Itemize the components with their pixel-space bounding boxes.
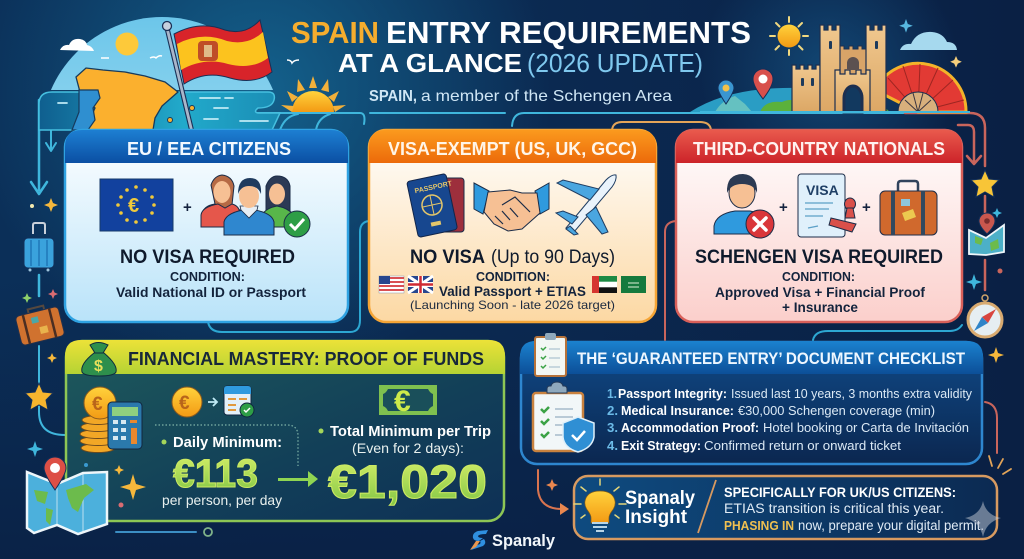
icon: euro banknote	[379, 385, 437, 418]
cloud	[60, 39, 94, 51]
insight text: PHASING IN	[724, 518, 794, 533]
condition text: Valid Passport + ETIAS	[439, 284, 586, 299]
sky dome	[51, 17, 273, 90]
icon: coin to calendar	[172, 386, 254, 417]
title: ENTRY REQUIREMENTS	[386, 16, 751, 50]
condition text: + Insurance	[782, 300, 858, 315]
checklist item 4: Confirmed return or onward ticket	[704, 438, 901, 453]
total minimum label: (Even for 2 days):	[352, 440, 464, 456]
sea	[39, 92, 280, 130]
icon: blue luggage	[24, 223, 54, 272]
connector lines	[31, 100, 997, 532]
icon: suitcase	[880, 181, 937, 235]
illustration: sun, globe, castle and fan	[690, 17, 970, 113]
icon: small clipboard	[535, 333, 566, 376]
status text: SCHENGEN VISA REQUIRED	[695, 247, 943, 268]
map pins	[718, 80, 734, 104]
plus sign: +	[183, 199, 192, 216]
title	[291, 16, 751, 78]
title: (2026 UPDATE)	[527, 48, 703, 78]
checklist item 4: 4.	[607, 438, 618, 453]
insight title	[625, 488, 695, 528]
divider slash	[698, 480, 716, 533]
icon: star right	[971, 170, 999, 197]
icon: EU flag	[100, 179, 173, 231]
status text: (Up to 90 Days)	[491, 247, 615, 268]
sun in sky	[116, 32, 138, 56]
insight text	[724, 485, 984, 533]
panel: EU / EEA citizens	[65, 130, 348, 322]
icon: money bag	[82, 342, 116, 376]
checklist item 3: Hotel booking or Carta de Invitación	[763, 420, 969, 435]
insight text: now, prepare your digital permit.	[798, 518, 984, 533]
icon: plane	[556, 175, 616, 235]
panel: visa-exempt	[369, 130, 656, 322]
Portugal land	[72, 90, 100, 130]
note text: (Launching Soon - late 2026 target)	[410, 298, 615, 312]
small circle marker	[204, 528, 212, 536]
castle	[792, 65, 820, 112]
illustration: Spain map with flag	[38, 17, 299, 131]
flag: UAE	[592, 276, 617, 293]
flag of Spain	[174, 20, 272, 84]
checklist item 2: Medical Insurance:	[621, 403, 734, 418]
checklist item 3: Accommodation Proof:	[621, 420, 759, 435]
icon: people with check	[201, 175, 310, 237]
heading: THIRD-COUNTRY NATIONALS	[693, 139, 945, 159]
insight title: Spanaly	[625, 488, 695, 509]
logo text: Spanaly	[492, 532, 556, 550]
flag pole	[167, 28, 192, 132]
daily amount caption: per person, per day	[162, 492, 282, 508]
arrow	[278, 471, 318, 487]
icon: visa document and stamp: VISA	[806, 182, 839, 198]
icon: money bag: $	[94, 358, 103, 375]
condition label: CONDITION:	[170, 269, 245, 284]
condition text: Valid National ID or Passport	[116, 285, 307, 300]
condition label: CONDITION:	[476, 269, 550, 284]
checklist item 4	[607, 438, 901, 453]
icon: world map left	[27, 457, 107, 534]
icon: compass	[968, 295, 1002, 337]
heading: FINANCIAL MASTERY: PROOF OF FUNDS	[128, 349, 484, 369]
arrow to insight	[560, 503, 569, 515]
flag: UK	[408, 276, 433, 293]
icon: EU flag: €	[128, 195, 139, 217]
subtitle: SPAIN,	[369, 88, 417, 105]
panel: third-country nationals	[676, 130, 962, 322]
checklist item 4: Exit Strategy:	[621, 438, 701, 453]
title: SPAIN	[291, 16, 379, 50]
sun	[770, 17, 808, 55]
insight text: SPECIFICALLY FOR UK/US CITIZENS:	[724, 485, 956, 500]
icon: handshake	[474, 183, 549, 231]
condition text	[715, 285, 926, 315]
icon: euro banknote: €	[394, 385, 411, 418]
icon: star left	[25, 383, 53, 410]
icon: light bulb	[574, 479, 626, 531]
cloud	[900, 32, 957, 50]
condition text: Approved Visa + Financial Proof	[715, 285, 926, 300]
status text	[410, 247, 615, 268]
panel: financial mastery	[65, 340, 505, 521]
icon: passports	[407, 172, 464, 238]
sparkles over financial panel	[84, 463, 146, 508]
globe	[690, 88, 800, 112]
condition label: CONDITION:	[782, 269, 855, 284]
checklist item 3: 3.	[607, 420, 618, 435]
icon: clipboard with shield	[533, 382, 594, 452]
Spain land	[76, 68, 178, 130]
total minimum label	[318, 423, 491, 456]
checklist item 2: €30,000 Schengen coverage (min)	[738, 403, 935, 418]
icon: passports: PASSPORT	[414, 180, 453, 195]
ground and fan	[874, 98, 890, 112]
brand logo	[470, 530, 556, 550]
checklist item 3	[607, 420, 969, 435]
checklist item 2	[607, 403, 935, 418]
icon: map right	[969, 213, 1004, 255]
value: daily amount: €113	[173, 452, 258, 496]
checklist item 1	[607, 386, 972, 401]
value: total amount: €1,020	[328, 455, 487, 508]
checklist item 1: Issued last 10 years, 3 months extra validity	[731, 386, 972, 401]
watermark sparkle	[965, 501, 1001, 537]
panel: document checklist	[520, 333, 983, 464]
flag: Saudi Arabia	[621, 276, 646, 293]
checklist item 1: Passport Integrity:	[618, 386, 727, 401]
flag: USA	[379, 276, 404, 293]
total minimum label: Total Minimum per Trip	[330, 423, 491, 440]
insight text: ETIAS transition is critical this year.	[724, 501, 944, 516]
icon: coin to calendar: €	[179, 393, 190, 414]
status text: NO VISA	[410, 247, 485, 268]
checklist item 1: 1.	[607, 386, 617, 401]
logo mark	[470, 530, 488, 550]
title: AT A GLANCE	[338, 48, 522, 78]
icon: coins and calculator: €	[92, 394, 103, 415]
dotted connector	[155, 425, 298, 466]
insight title: Insight	[625, 507, 688, 528]
subtitle: a member of the Schengen Area	[421, 88, 672, 105]
checklist item 2: 2.	[607, 403, 618, 418]
icon: brown suitcase left	[14, 302, 65, 346]
daily minimum label: Daily Minimum:	[173, 434, 282, 451]
plus sign: +	[862, 199, 871, 216]
icon: person with cross	[714, 174, 774, 238]
status text: NO VISA REQUIRED	[120, 247, 295, 268]
heading: EU / EEA CITIZENS	[127, 139, 291, 159]
icon: half sun	[281, 76, 346, 112]
heading: THE ‘GUARANTEED ENTRY’ DOCUMENT CHECKLIST	[577, 349, 966, 368]
plus sign: +	[779, 199, 788, 216]
icon: coins and calculator	[80, 387, 142, 452]
heading: VISA-EXEMPT (US, UK, GCC)	[388, 139, 637, 159]
panel: Spanaly insight	[574, 476, 1001, 539]
icon: visa document and stamp	[798, 174, 856, 237]
